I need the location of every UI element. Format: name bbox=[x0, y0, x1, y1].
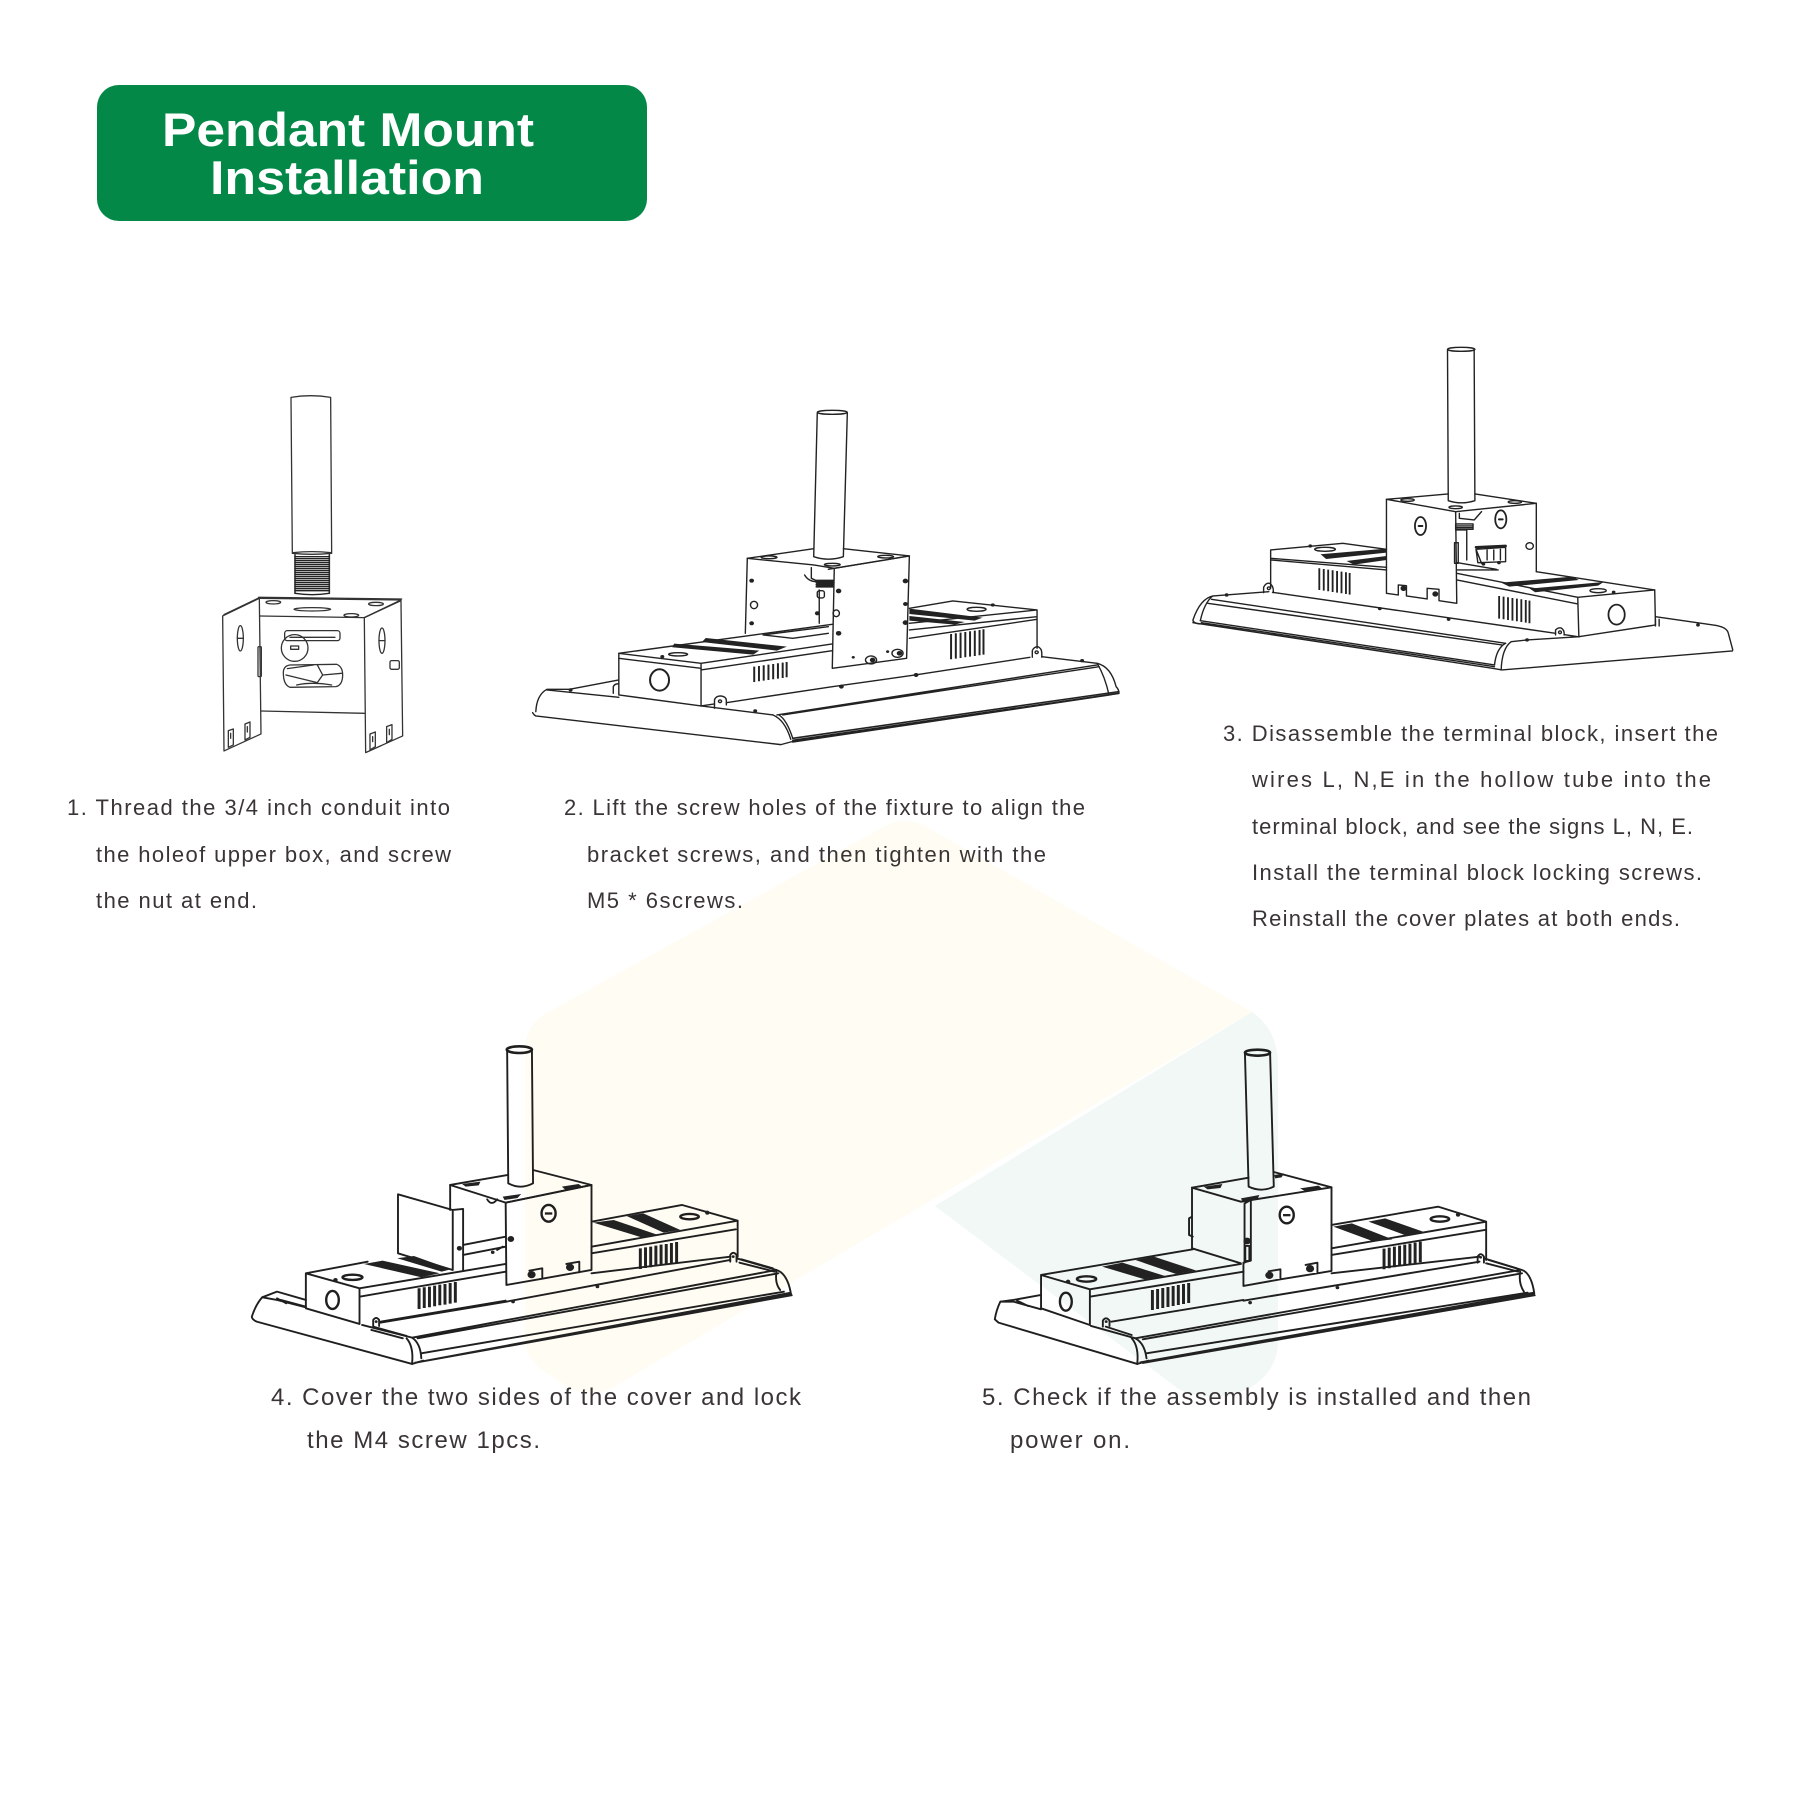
step 2 text: M5 * 6screws. bbox=[587, 888, 743, 913]
illustration: step 1 conduit and bracket bbox=[223, 396, 403, 753]
step 5 text: power on. bbox=[1010, 1427, 1130, 1454]
step 1 text: 1. Thread the 3/4 inch conduit into bbox=[67, 795, 450, 820]
illustration: step 3 fixture with terminal block bbox=[1193, 347, 1733, 670]
step 3 text bbox=[1223, 721, 1718, 931]
title banner: Installation bbox=[210, 151, 484, 204]
illustration: step 5 fully assembled fixture bbox=[995, 1050, 1536, 1364]
step 5 text bbox=[982, 1384, 1531, 1454]
step 3 text: wires L, N,E in the hollow tube into the bbox=[1251, 767, 1711, 792]
title banner bbox=[97, 85, 647, 221]
step 4 text bbox=[271, 1384, 802, 1454]
background shape: pale green facet bbox=[935, 1012, 1278, 1397]
step 3 text: terminal block, and see the signs L, N, E. bbox=[1252, 814, 1693, 839]
step 2 text bbox=[564, 795, 1085, 913]
step 1 text: the nut at end. bbox=[96, 888, 257, 913]
step 2 text: bracket screws, and then tighten with the bbox=[587, 842, 1046, 867]
step 3 text: Reinstall the cover plates at both ends. bbox=[1252, 906, 1680, 931]
step 3 text: 3. Disassemble the terminal block, insert the bbox=[1223, 721, 1718, 746]
illustration: step 2 fixture with bracket aligned bbox=[533, 410, 1119, 745]
step 4 text: the M4 screw 1pcs. bbox=[307, 1427, 540, 1454]
step 2 text: 2. Lift the screw holes of the fixture to align the bbox=[564, 795, 1085, 820]
background shape: pale yellow hexagon bbox=[525, 821, 1252, 1393]
step 1 text bbox=[67, 795, 451, 913]
title banner: Pendant Mount bbox=[162, 103, 534, 156]
step 5 text: 5. Check if the assembly is installed and then bbox=[982, 1384, 1531, 1411]
step 1 text: the holeof upper box, and screw bbox=[96, 842, 451, 867]
step 3 text: Install the terminal block locking screws. bbox=[1252, 860, 1702, 885]
illustration: step 4 fixture with cover open bbox=[252, 1046, 793, 1364]
step 4 text: 4. Cover the two sides of the cover and lock bbox=[271, 1384, 802, 1411]
